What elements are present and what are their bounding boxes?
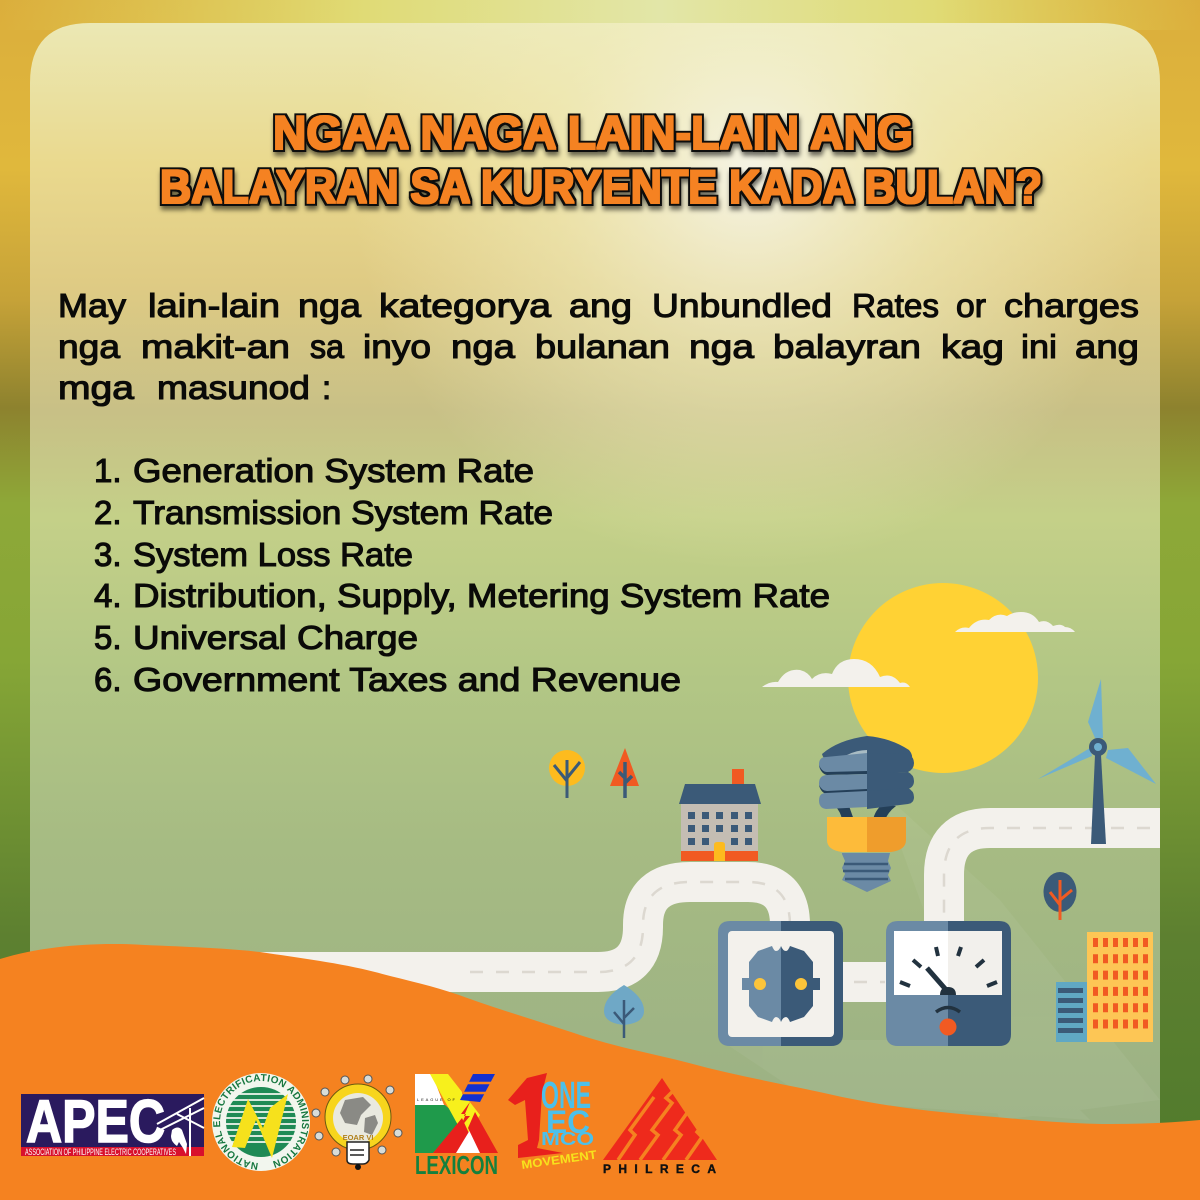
intro paragraph — [58, 287, 1139, 406]
logo: Philreca: PHILRECA — [603, 1162, 716, 1176]
title: BALAYRAN SA KURYENTE KADA BULAN? — [160, 161, 1042, 214]
title: NGAA NAGA LAIN-LAIN ANG — [273, 107, 913, 160]
numbered list of rates: 2. — [94, 494, 122, 531]
intro paragraph: ang — [569, 287, 632, 324]
intro paragraph: inyo — [363, 328, 431, 365]
icon: cloud left — [762, 659, 910, 687]
logo: National Electrification Administration: NATIONAL ELECTRIFICATION ADMINISTRATION — [213, 1074, 309, 1170]
numbered list of rates: 1. — [94, 452, 122, 489]
intro paragraph: bulanan — [535, 328, 670, 365]
numbered list of rates: 3. — [94, 536, 122, 573]
icon: sun — [848, 583, 1038, 773]
numbered list of rates: Transmission System Rate — [133, 494, 553, 531]
intro paragraph: nga — [58, 328, 121, 365]
intro paragraph: May — [58, 287, 127, 324]
logo: APEC: APEC — [26, 1088, 165, 1155]
intro paragraph: or — [956, 287, 986, 324]
icon: small navy tree — [1044, 872, 1076, 920]
numbered list of rates: 6. — [94, 661, 122, 698]
intro paragraph: ang — [1075, 328, 1139, 365]
icon: wind turbine — [1038, 679, 1156, 844]
illustration: soft light rays — [720, 790, 1160, 1120]
orange wave footer — [0, 944, 1200, 1200]
icon: orange tree — [610, 748, 639, 798]
road: connector — [840, 962, 888, 1002]
icon: electric meter — [886, 921, 1011, 1046]
numbered list of rates: 4. — [94, 577, 122, 614]
numbered list of rates: Distribution, Supply, Metering System Rate — [133, 577, 830, 614]
logo: Lexicon: LEAGUE OF — [417, 1097, 456, 1102]
logo: One ECMCO Movement: EC — [546, 1104, 590, 1140]
logo: Philreca — [603, 1078, 717, 1176]
intro paragraph: Unbundled — [652, 287, 832, 324]
icon: energy saving light bulb — [819, 736, 914, 892]
intro paragraph: Rates — [852, 287, 939, 324]
intro paragraph: nga — [451, 328, 516, 365]
numbered list of rates: Universal Charge — [133, 619, 418, 656]
road: right road — [944, 828, 1160, 925]
intro paragraph: balayran — [773, 328, 921, 365]
logo: One ECMCO Movement — [508, 1073, 598, 1172]
numbered list of rates: Government Taxes and Revenue — [133, 661, 681, 698]
icon: cloud right — [955, 612, 1075, 632]
intro paragraph: charges — [1004, 287, 1139, 324]
logo: APEC: ASSOCIATION OF PHILIPPINE ELECTRIC COOPERATIVES — [25, 1147, 176, 1157]
intro paragraph: masunod — [157, 369, 310, 406]
numbered list of rates — [94, 452, 830, 698]
intro paragraph: lain-lain — [148, 287, 280, 324]
intro paragraph: sa — [310, 328, 345, 365]
logo: Lexicon: LEXICON — [415, 1150, 498, 1180]
icon: wall socket — [718, 921, 843, 1046]
road: left winding road — [230, 882, 790, 972]
intro paragraph: ini — [1021, 328, 1057, 365]
numbered list of rates: System Loss Rate — [133, 536, 413, 573]
icon: apartment buildings — [1056, 932, 1153, 1042]
intro paragraph: : — [322, 369, 331, 406]
title — [160, 107, 1042, 214]
logo: Lexicon — [415, 1074, 498, 1180]
intro paragraph: mga — [58, 369, 135, 406]
intro paragraph: kag — [941, 328, 1004, 365]
intro paragraph: nga — [689, 328, 755, 365]
intro paragraph: nga — [298, 287, 362, 324]
icon: blue tree — [604, 985, 644, 1038]
intro paragraph: kategorya — [379, 287, 552, 324]
logo: One ECMCO Movement: ONE — [541, 1075, 591, 1117]
logo: One ECMCO Movement: MCO — [541, 1129, 594, 1149]
numbered list of rates: Generation System Rate — [133, 452, 534, 489]
intro paragraph: makit-an — [141, 328, 290, 365]
icon: yellow tree — [549, 750, 585, 798]
logo: EOAR VI light bulb: EOAR VI — [343, 1133, 373, 1142]
logo: One ECMCO Movement: MOVEMENT — [520, 1147, 598, 1172]
icon: house — [679, 769, 761, 861]
logo: EOAR VI light bulb — [312, 1075, 402, 1170]
numbered list of rates: 5. — [94, 619, 122, 656]
